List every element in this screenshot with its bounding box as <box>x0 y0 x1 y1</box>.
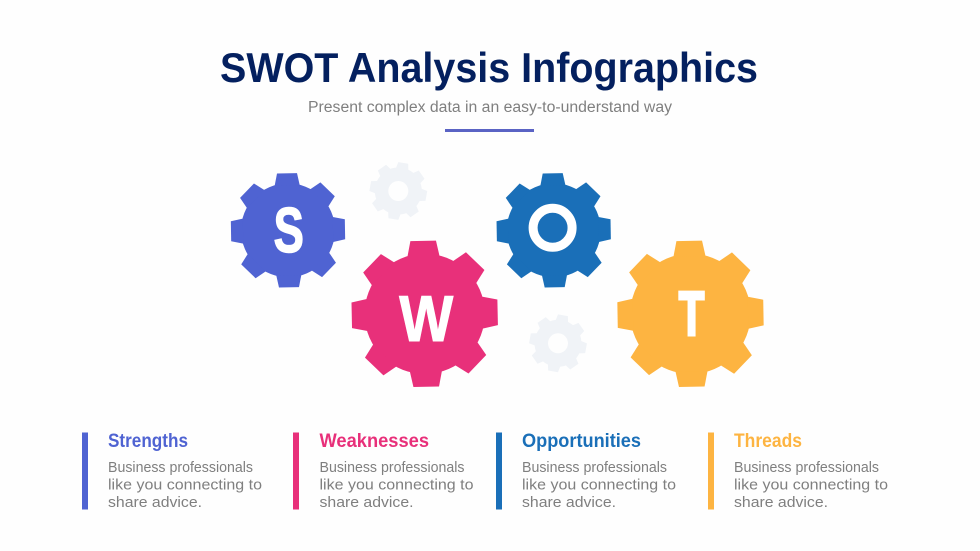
panel: Opportunities: Opportunities <box>522 431 641 452</box>
panel: Weaknesses: like you connecting to <box>320 476 474 494</box>
icon: gear S <box>230 172 346 288</box>
panel: Weaknesses <box>293 431 474 511</box>
icon: gear O: O <box>528 195 577 264</box>
panel: Opportunities: like you connecting to <box>522 476 676 494</box>
icon: small grey gear bottom <box>525 310 591 376</box>
panel: Opportunities <box>496 431 676 511</box>
icon: gear T: T <box>679 280 704 349</box>
subtitle: Present complex data in an easy-to-understand way <box>308 99 672 116</box>
panel: Weaknesses: Business professionals <box>320 459 464 476</box>
panel: Threads <box>708 431 888 511</box>
icon: gear O <box>496 172 612 288</box>
title: SWOT Analysis Infographics <box>220 44 758 91</box>
panel: Weaknesses: share advice. <box>320 494 414 511</box>
panel: Strengths: Strengths <box>108 431 188 452</box>
title underline <box>445 129 534 132</box>
icon: small grey gear top <box>365 158 431 224</box>
panel: Strengths: like you connecting to <box>108 476 262 494</box>
panel: Opportunities: Business professionals <box>522 459 667 476</box>
panel: Strengths <box>82 431 262 511</box>
panel: Threads: share advice. <box>734 494 828 511</box>
icon: gear W <box>350 239 499 388</box>
icon: gear S: S <box>274 195 304 266</box>
panel: Strengths: share advice. <box>108 494 202 511</box>
panel: Threads: like you connecting to <box>734 476 888 494</box>
icon: gear T <box>616 240 765 388</box>
icon: gear W: W <box>399 283 453 355</box>
panel: Threads: Business professionals <box>734 459 879 476</box>
panel: Threads: Threads <box>734 431 802 452</box>
panel: Strengths: Business professionals <box>108 459 253 476</box>
panel: Weaknesses: Weaknesses <box>320 431 429 452</box>
panel: Opportunities: share advice. <box>522 494 616 511</box>
